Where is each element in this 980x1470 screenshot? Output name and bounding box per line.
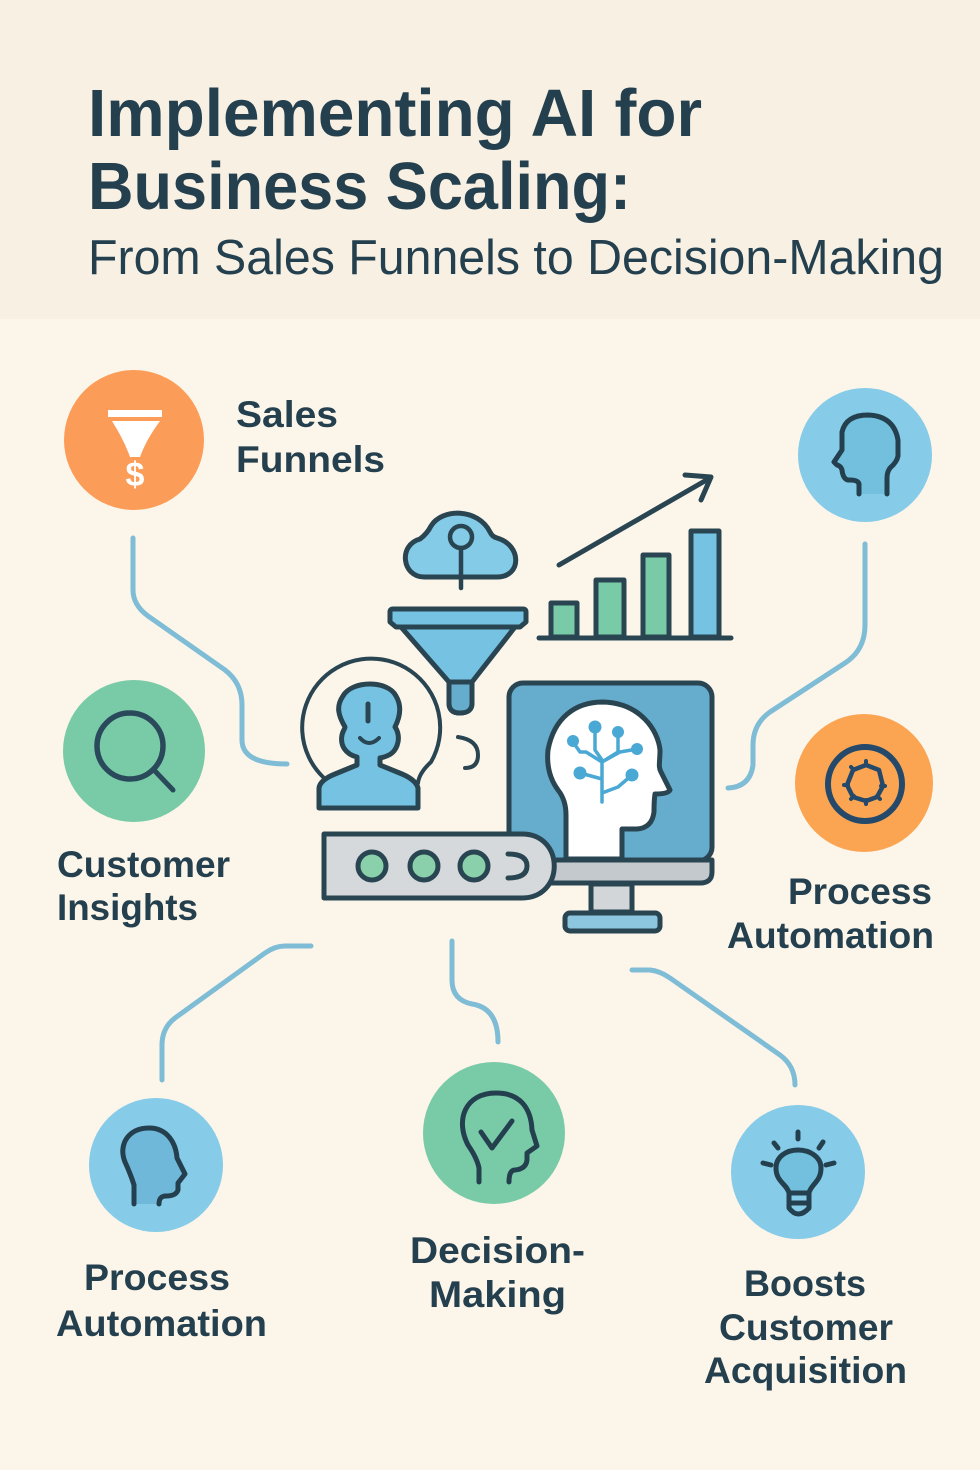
label: sales funnels: Funnels (236, 439, 385, 480)
subtitle: From Sales Funnels to Decision-Making (88, 231, 944, 285)
icon: magnifier customer insights (63, 680, 205, 822)
arrow (559, 475, 711, 565)
icon: cloud (405, 513, 516, 588)
label: boosts customer acquisition: Customer (719, 1307, 893, 1348)
title: Implementing AI for (88, 76, 702, 151)
label: sales funnels: Sales (236, 394, 338, 435)
connector lines (133, 538, 865, 1085)
icon: head top right (798, 388, 932, 522)
icon: head process automation bottom (89, 1098, 223, 1232)
icon: light bulb (731, 1105, 865, 1239)
label: sales funnels (236, 394, 385, 480)
label: process automation right: Automation (727, 915, 934, 956)
label: customer insights (57, 844, 230, 928)
central illustration (302, 475, 731, 931)
icon: sales funnel circle: $ (126, 456, 145, 494)
icon: head with check (423, 1062, 565, 1204)
label: process automation right: Process (788, 871, 932, 912)
label: decision-making (410, 1230, 585, 1315)
label: process automation bottom (56, 1257, 267, 1344)
icon: person in circle (302, 659, 440, 808)
icon: monitor with brain head (509, 683, 712, 931)
bar chart (539, 475, 731, 638)
label: boosts customer acquisition (704, 1263, 907, 1391)
small hook mark (458, 737, 478, 768)
icon: sales funnel circle (64, 370, 204, 510)
label: decision-making: Decision- (410, 1230, 585, 1271)
label: boosts customer acquisition: Boosts (744, 1263, 866, 1304)
icon: control panel bar (324, 834, 554, 898)
label: process automation right (727, 871, 934, 956)
label: boosts customer acquisition: Acquisition (704, 1350, 907, 1391)
label: process automation bottom: Automation (56, 1303, 267, 1344)
label: decision-making: Making (429, 1274, 566, 1315)
label: customer insights: Customer (57, 844, 230, 885)
label: process automation bottom: Process (84, 1257, 230, 1298)
title line 2: Business Scaling: (88, 149, 631, 224)
label: customer insights: Insights (57, 887, 198, 928)
icon: gear process automation (795, 714, 933, 852)
header band (0, 0, 980, 319)
icon: central funnel (390, 609, 526, 713)
